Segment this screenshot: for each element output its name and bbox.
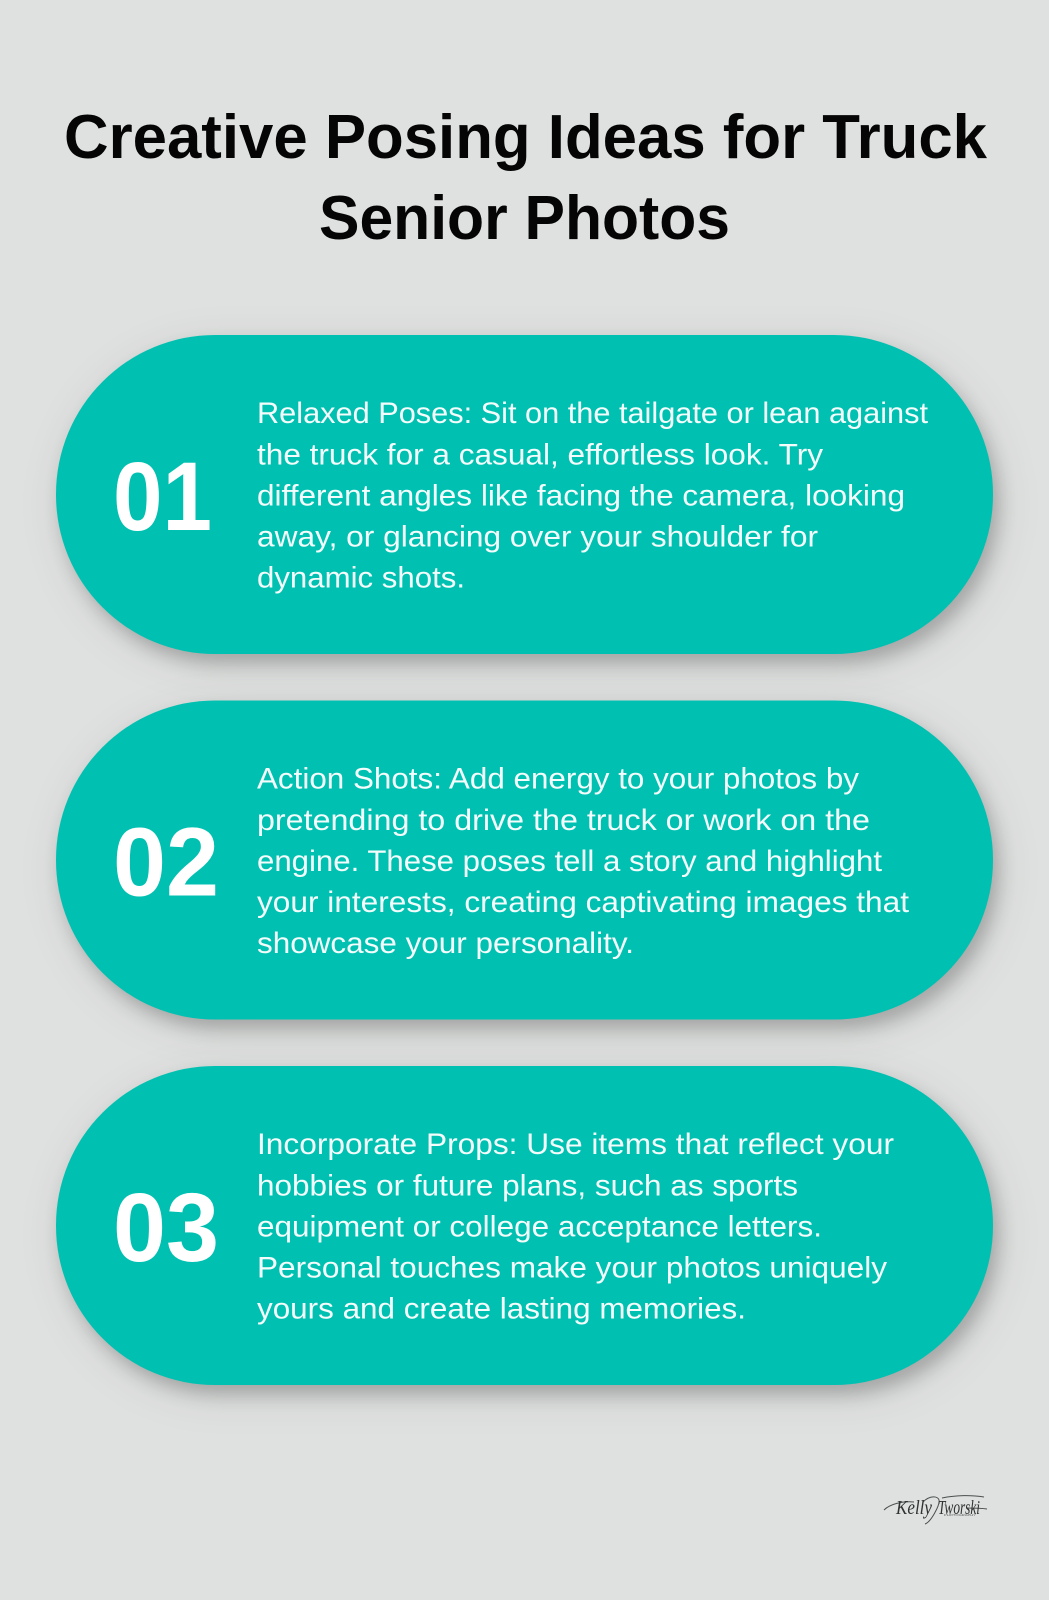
panel: step 02 action shots — [56, 700, 999, 1030]
text: relaxed poses: Relaxed Poses: Sit on the tailgate or lean against — [257, 397, 929, 430]
text: relaxed poses: dynamic shots. — [257, 562, 465, 594]
logo: signature: Tworski — [938, 1497, 980, 1519]
title — [64, 103, 988, 253]
panel: step 01 relaxed poses — [56, 335, 999, 664]
text: relaxed poses — [257, 397, 929, 594]
text: action shots: your interests, creating captivating images that — [257, 886, 910, 919]
text: incorporate props: yours and create lasting memories. — [257, 1292, 746, 1326]
text: incorporate props: hobbies or future plans, such as sports — [257, 1170, 798, 1202]
text: action shots — [257, 762, 910, 960]
logo: signature: PHOTOGRAPHY — [944, 1513, 976, 1517]
text: incorporate props: Incorporate Props: Use items that reflect your — [257, 1128, 894, 1161]
logo: signature — [884, 1496, 987, 1524]
text: relaxed poses: different angles like facing the camera, looking — [257, 480, 905, 512]
title: Senior Photos — [319, 184, 730, 253]
text: action shots: pretending to drive the truck or work on the — [257, 804, 870, 837]
text: action shots: showcase your personality. — [257, 927, 634, 960]
text: incorporate props — [257, 1128, 894, 1326]
number 03: 03 — [113, 1173, 219, 1282]
text: action shots: engine. These poses tell a story and highlight — [257, 845, 883, 878]
title: Creative Posing Ideas for Truck — [64, 103, 988, 172]
text: relaxed poses: away, or glancing over your shoulder for — [257, 520, 818, 554]
text: action shots: Action Shots: Add energy to your photos by — [257, 762, 859, 796]
number 01: 01 — [113, 442, 212, 551]
logo: signature: Kelly — [895, 1497, 932, 1519]
number 02: 02 — [113, 808, 219, 916]
text: incorporate props: equipment or college acceptance letters. — [257, 1210, 822, 1244]
text: relaxed poses: the truck for a casual, effortless look. Try — [257, 438, 823, 472]
text: incorporate props: Personal touches make your photos uniquely — [257, 1252, 887, 1284]
panel: step 03 incorporate props — [56, 1066, 999, 1395]
